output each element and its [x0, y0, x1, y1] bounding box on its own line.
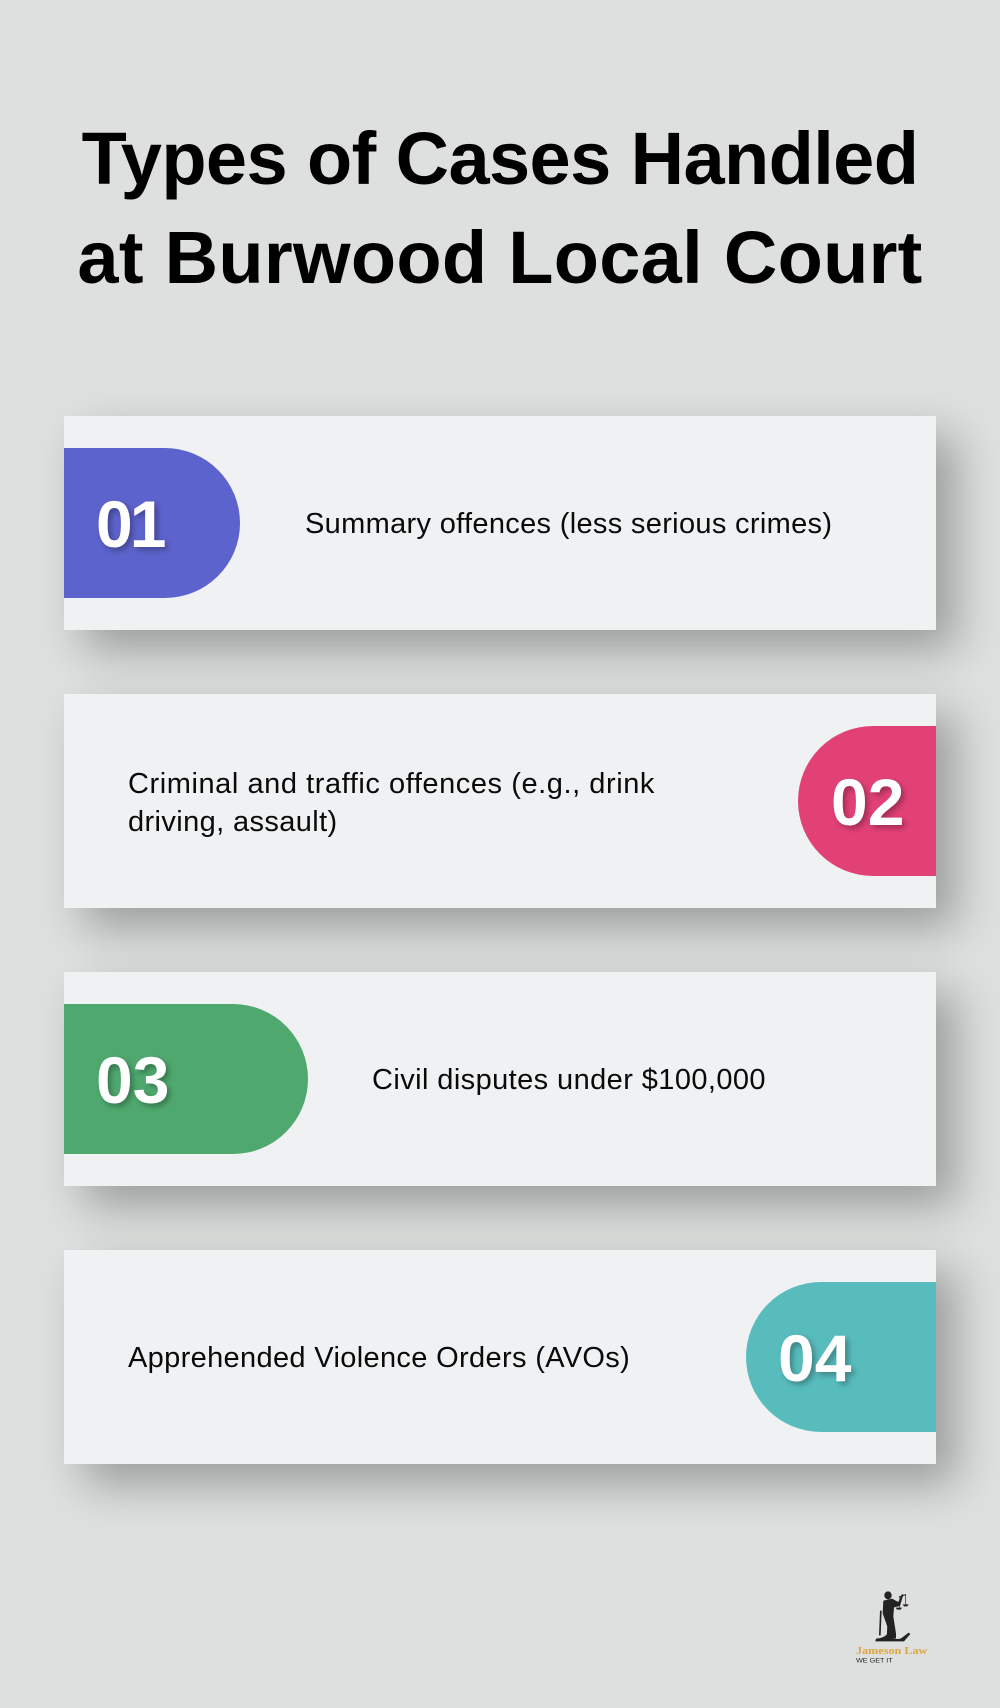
text: summary offences: Summary offences (less serious crimes): [305, 508, 832, 540]
text: AVOs: Apprehended Violence Orders (AVOs): [128, 1342, 630, 1374]
text: civil disputes: Civil disputes under $100,000: [372, 1064, 766, 1096]
panel: case type 04: [64, 1250, 936, 1464]
title: [77, 117, 923, 299]
panel: case type 01: [64, 416, 936, 630]
number badge 01: 01: [96, 487, 163, 561]
text: criminal and traffic offences: Criminal and traffic offences (e.g., drink: [128, 768, 655, 800]
number badge 01: [64, 448, 240, 598]
number badge 02: [798, 726, 936, 876]
logo: Jameson Law: [856, 1591, 928, 1664]
number badge 03: 03: [96, 1043, 169, 1117]
panel: case type 02: [64, 694, 936, 908]
text: criminal and traffic offences: driving, assault): [128, 806, 338, 838]
text: We get it: WE GET IT: [856, 1657, 893, 1664]
number badge 03: [64, 1004, 308, 1154]
panel: case type 03: [64, 972, 936, 1186]
number badge 04: [746, 1282, 936, 1432]
text: criminal and traffic offences: [128, 768, 655, 838]
title: at Burwood Local Court: [77, 216, 923, 299]
number badge 02: 02: [831, 765, 904, 839]
title: Types of Cases Handled: [82, 117, 918, 200]
icon: lady justice: [875, 1591, 910, 1641]
number badge 04: 04: [778, 1321, 851, 1395]
text: Jameson Law: Jameson Law: [856, 1646, 928, 1657]
